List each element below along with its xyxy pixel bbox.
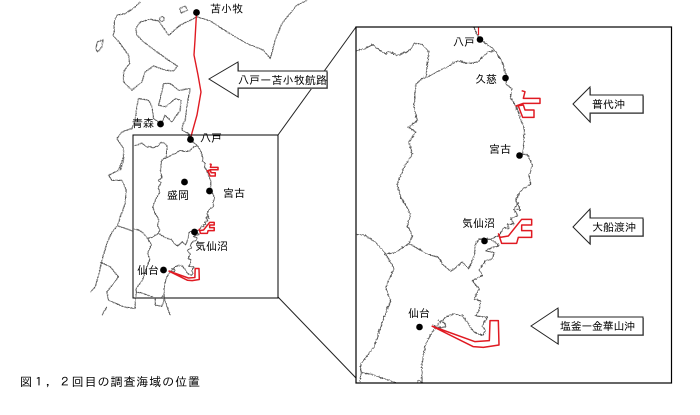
overview city labels: 宮古	[223, 188, 245, 200]
inset city labels: 宮古	[489, 144, 511, 156]
inset city labels: 八戸	[453, 37, 475, 49]
route stub	[478, 27, 480, 35]
callout arrow: Hachinohe-Tomakomai route	[209, 62, 328, 98]
Iwate and Miyagi outlines	[134, 135, 214, 297]
Hachinohe to Tomakomai route	[190, 13, 201, 140]
caption: 図１，２回目の調査海域の位置	[20, 375, 200, 389]
callout arrow: Fudai offshore	[573, 87, 644, 123]
overview city markers	[157, 9, 213, 273]
Tohoku west coast and borders	[90, 157, 170, 315]
inset city labels: 久慈	[475, 73, 497, 86]
inset city labels: 仙台	[408, 307, 430, 320]
inset survey tracks	[432, 91, 540, 347]
callout arrow: Ofunato offshore: 大船渡沖	[592, 221, 636, 234]
overview map: land outlines	[90, 0, 307, 315]
overview city labels: 八戸	[200, 133, 222, 145]
callout arrow: Fudai offshore: 普代沖	[592, 98, 625, 111]
callout arrow: Hachinohe-Tomakomai route: 八戸ー苫小牧航路	[238, 74, 327, 87]
overview city labels: 仙台	[137, 264, 159, 277]
callout arrow: Shiogama to Kinkasan offshore	[531, 308, 644, 345]
overview city labels: 青森	[132, 118, 154, 130]
overview frame	[133, 135, 278, 298]
Hokkaido coast	[96, 0, 307, 90]
overview city labels	[132, 4, 245, 277]
overview city labels: 盛岡	[167, 190, 189, 202]
leader lines from overview box to inset	[278, 27, 356, 378]
callout arrow: Ofunato offshore	[573, 209, 644, 245]
Aomori coast	[117, 83, 191, 170]
callout arrow: Shiogama to Kinkasan offshore: 塩釜ー金華山沖	[560, 320, 635, 333]
inset frame	[356, 27, 672, 383]
inset city labels	[408, 37, 511, 320]
overview city labels: 気仙沼	[195, 240, 228, 253]
inset city markers	[416, 36, 523, 330]
overview city labels: 苫小牧	[210, 4, 243, 16]
inset city labels: 気仙沼	[462, 217, 495, 230]
survey tracks on overview	[169, 164, 218, 281]
inset map: land outlines	[356, 27, 532, 383]
